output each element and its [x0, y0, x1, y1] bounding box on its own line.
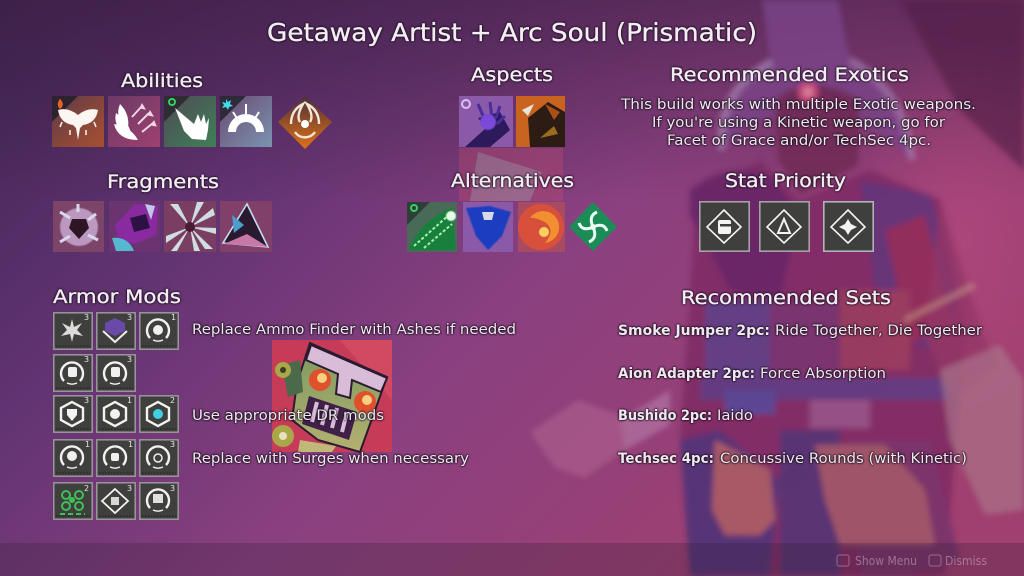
icon: stat class [760, 202, 809, 251]
heading: fragments: Fragments [107, 171, 219, 193]
belt [700, 378, 960, 428]
set: aion adapter [618, 366, 886, 382]
icon: fragment shards [164, 201, 216, 252]
mod: green drone: 2 [84, 484, 89, 493]
panel: recommended sets [618, 287, 982, 467]
set: smoke jumper: Smoke Jumper 2pc: [618, 323, 770, 339]
panel: abilities [52, 70, 332, 149]
row 1 mods [54, 313, 178, 349]
set: bushido: Iaido [717, 408, 753, 424]
mod: diamond: 3 [127, 484, 132, 493]
set: smoke jumper: Ride Together, Die Together [775, 323, 982, 339]
hat [721, 0, 912, 160]
arm and hand left [530, 390, 670, 478]
face with glowing eye [775, 82, 860, 195]
set: smoke jumper [618, 323, 982, 339]
row 4 mods [54, 440, 178, 476]
notes: Replace with Surges when necessary [192, 451, 469, 467]
lower coat [680, 430, 960, 576]
heading: recommended exotics: Recommended Exotics [670, 64, 909, 86]
mod: grenade ring 2: 3 [127, 355, 132, 364]
set: techsec: Concussive Rounds (with Kinetic) [720, 451, 967, 467]
bottom bar [0, 543, 1024, 576]
set: aion adapter: Force Absorption [760, 366, 886, 382]
icon: fragment crystal [109, 201, 160, 252]
mod: arc resistance: 2 [170, 396, 175, 405]
set: bushido: Bushido 2pc: [618, 408, 712, 424]
heading: aspects: Aspects [471, 64, 553, 86]
row 2 mods [54, 355, 135, 391]
mod: resistance shield: 3 [84, 396, 89, 405]
text: exotics note: If you're using a Kinetic weapon, go for [652, 115, 945, 131]
panel: stat priority [700, 170, 873, 251]
heading: recommended sets: Recommended Sets [681, 287, 891, 309]
icon: fragment prism [220, 201, 272, 252]
notes [192, 322, 516, 467]
mod: ring 1: 1 [85, 440, 90, 449]
row 3 mods [54, 396, 178, 432]
icon: stat weapons [700, 202, 749, 251]
panel: armor mods [53, 286, 516, 519]
mod: ring 2: 1 [128, 440, 133, 449]
panel: recommended exotics [620, 64, 976, 149]
arm right [905, 200, 1024, 515]
notes: Use appropriate DR mods [192, 408, 384, 424]
icon: stat super [824, 202, 873, 251]
mod: grenade ring 1: 3 [84, 355, 89, 364]
icon: strand diamond [569, 202, 617, 251]
icon: feathers class ability [108, 96, 160, 147]
button hint: dismiss: Dismiss [945, 554, 987, 568]
heading: armor mods: Armor Mods [53, 286, 181, 308]
mod: harmonic siphon: 3 [84, 313, 89, 322]
button hint: dismiss [929, 554, 987, 568]
set: aion adapter: Aion Adapter 2pc: [618, 366, 755, 382]
mod: prismatic resistance: 1 [127, 396, 132, 405]
notes: Replace Ammo Finder with Ashes if needed [192, 322, 516, 338]
button hint: show menu: Show Menu [855, 554, 917, 568]
panel: alternatives [407, 170, 617, 252]
icon: super diamond [278, 96, 332, 149]
coat torso [680, 160, 965, 576]
icon: fragment burst [53, 201, 104, 252]
text: exotics note [620, 97, 976, 149]
illustration: character figure [530, 0, 1024, 576]
text: exotics note: Facet of Grace and/or TechSec 4pc. [667, 133, 931, 149]
panel: aspects [459, 64, 565, 201]
icon: sunrise grenade [220, 96, 272, 147]
heading: abilities: Abilities [121, 70, 203, 92]
mod: purple ammo finder: 3 [127, 313, 132, 322]
mod: prismatic ring: 1 [171, 313, 176, 322]
heading: stat priority: Stat Priority [725, 170, 846, 192]
image: faded robot behind alternatives [459, 148, 563, 201]
icon: strand blade [407, 202, 457, 252]
pouch right [815, 445, 935, 545]
icon: void hand aspect [459, 96, 513, 147]
icon: solar swirl [518, 202, 565, 252]
pouch left [712, 440, 775, 535]
mod: ring 4: 3 [170, 484, 175, 493]
heading: alternatives: Alternatives [451, 170, 574, 192]
mod: ring 3: 3 [170, 440, 175, 449]
set: techsec [618, 451, 967, 467]
icon: moth super [52, 96, 104, 147]
text: exotics note: This build works with multiple Exotic weapons. [620, 97, 976, 113]
set: techsec: Techsec 4pc: [618, 451, 714, 467]
icon: hand melee [164, 96, 216, 147]
icon: solar aspect [516, 96, 565, 147]
image: robot sticker [272, 340, 392, 452]
title: Getaway Artist + Arc Soul (Prismatic) [267, 18, 757, 47]
row 5 mods [54, 483, 178, 519]
panel: fragments [53, 171, 272, 252]
icon: stasis crystal [463, 202, 513, 252]
